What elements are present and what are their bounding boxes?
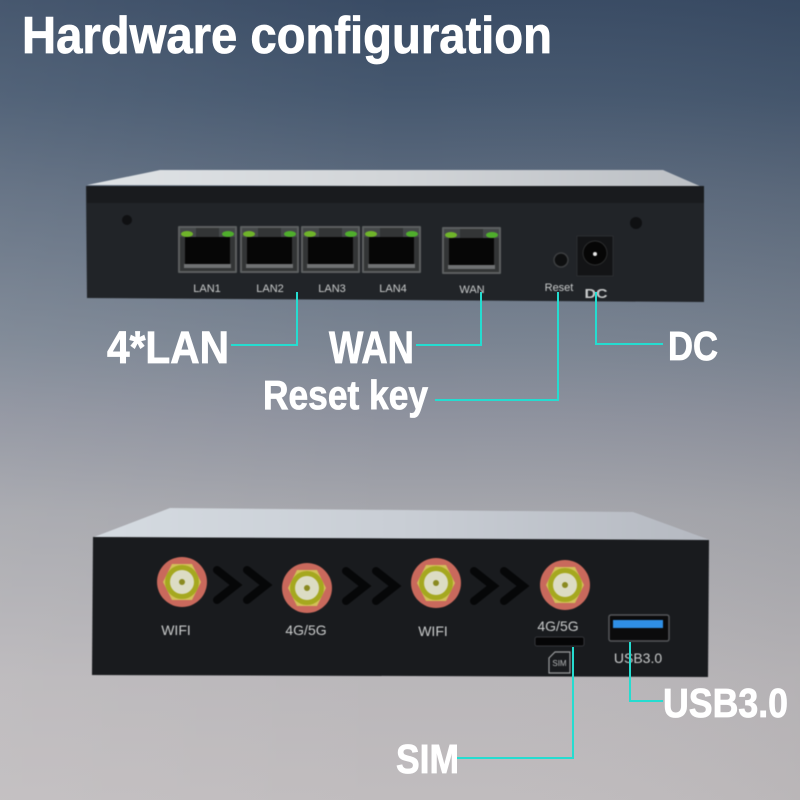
connector: USB3.0 [630,642,663,701]
LAN4 port [362,226,421,273]
chevrons 1 [217,570,266,600]
antenna labels: WIFI [418,623,448,639]
port labels: LAN2 [256,283,284,295]
label: SIM: SIM [396,736,459,782]
icon: left screw [122,215,132,225]
connector: WAN [416,292,481,345]
icon: SIM: SIM [552,659,567,668]
label: Reset key: Reset key [263,372,428,418]
connector: 4*LAN [231,292,297,345]
connector: DC [596,292,663,344]
chevrons 3 [474,571,523,601]
WIFI connector 2 [411,558,461,608]
4G/5G connector 2 [540,560,590,610]
4G/5G connector 1 [282,563,332,613]
antenna labels: 4G/5G [285,622,327,638]
connector: SIM [457,647,573,758]
connector: Reset key [435,292,558,400]
antenna labels: 4G/5G [537,618,579,634]
port labels: LAN3 [318,283,346,295]
icon: right screw [630,217,642,229]
LAN3 port [301,226,360,273]
port labels: DC [584,286,608,301]
title: Hardware configuration [22,7,552,65]
LAN2 port [240,226,299,273]
port labels: Reset [545,282,573,294]
LAN1 port [178,226,237,273]
router top face [94,508,710,540]
label: DC: DC [668,323,718,369]
panel: router antenna view [92,508,710,677]
icon: SIM [549,652,570,673]
WAN port [442,227,501,274]
antenna labels [161,618,662,666]
router front face [92,537,709,677]
router top face [87,170,702,187]
USB3.0 port [609,615,669,641]
port labels [193,282,608,301]
reset button [554,253,568,267]
port labels: LAN4 [379,283,407,295]
port labels: WAN [459,284,485,296]
panel: router rear view [86,170,704,302]
antenna labels: USB3.0 [614,650,662,666]
router front face [86,186,704,302]
chevrons 2 [346,571,395,601]
label: WAN: WAN [329,322,414,373]
WIFI connector 1 [157,557,207,607]
antenna labels: WIFI [161,622,191,638]
port labels: LAN1 [193,283,221,295]
SIM slot [535,637,584,646]
DC jack [577,236,613,276]
label: 4*LAN: 4*LAN [107,322,229,373]
